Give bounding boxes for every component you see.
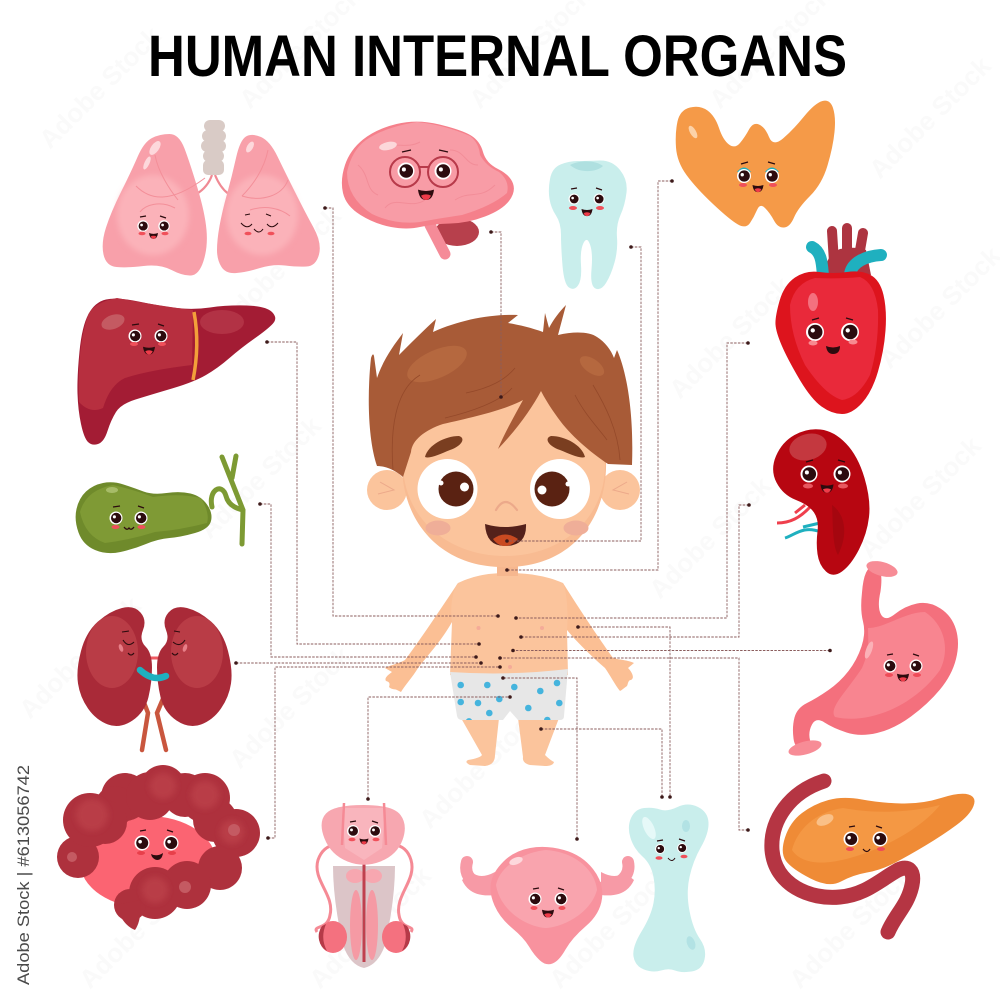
chest marks	[476, 626, 544, 669]
stock watermark: Adobe Stock	[783, 860, 917, 994]
gallbladder face	[110, 506, 148, 529]
esophagus ring	[865, 558, 899, 580]
stock watermark: Adobe Stock	[303, 860, 437, 994]
boy mouth	[485, 524, 526, 546]
cerebrum	[342, 122, 514, 228]
right lung face	[241, 214, 278, 235]
stock watermark: Adobe Stock	[543, 860, 677, 994]
liver face	[128, 324, 168, 354]
aorta	[825, 248, 871, 275]
liver right lobe highlight	[200, 310, 244, 334]
stomach face	[884, 654, 922, 682]
organ: spleen	[773, 429, 869, 575]
bone highlight	[639, 815, 659, 841]
stock watermark: Adobe Stock	[853, 430, 987, 564]
bile ducts	[211, 456, 243, 544]
gallbladder light	[80, 485, 208, 543]
underwear	[450, 669, 568, 720]
heart body	[775, 271, 886, 414]
stock watermark: Adobe Stock	[223, 640, 357, 774]
stomach highlight	[863, 641, 875, 659]
stock watermark: Adobe Stock	[643, 470, 777, 604]
trachea	[201, 120, 226, 175]
stock watermark: Adobe Stock	[213, 200, 347, 334]
bone spots	[682, 820, 697, 951]
organ: uterus	[462, 847, 634, 964]
tooth crown cap	[570, 161, 603, 171]
urethra	[362, 862, 366, 962]
prostate face	[347, 821, 381, 844]
stock watermark: Adobe Stock	[193, 410, 327, 544]
thyroid highlight	[687, 124, 699, 140]
stock watermark: Adobe Stock	[73, 860, 207, 994]
colon highlights	[67, 824, 240, 893]
liver highlight	[99, 311, 127, 333]
right lung	[217, 135, 320, 273]
boy hair	[369, 305, 632, 477]
pancreas body	[783, 794, 975, 884]
organ: male reproductive system	[316, 803, 412, 968]
organ: heart	[775, 228, 886, 414]
liver ligament	[193, 312, 197, 380]
boy torso	[450, 573, 568, 675]
testes	[319, 921, 410, 953]
left lung	[103, 134, 207, 276]
fallopian tubes	[462, 862, 634, 895]
organ: thyroid	[676, 101, 835, 228]
bone body	[629, 804, 709, 972]
spleen shade	[832, 505, 844, 555]
stock watermark: Adobe Stock	[33, 20, 167, 154]
stock watermark: Adobe Stock	[663, 270, 797, 404]
bladder	[322, 805, 405, 865]
organ: stomach	[787, 558, 958, 759]
cerebrum light	[347, 122, 508, 223]
colon	[57, 765, 260, 930]
organ: tooth	[549, 160, 627, 289]
thyroid body	[676, 101, 835, 228]
renal vein	[140, 670, 166, 678]
pancreas highlight	[815, 812, 835, 828]
heart highlight	[808, 293, 818, 311]
uterus body	[490, 847, 602, 964]
pylorus ring	[787, 737, 823, 759]
left kidney	[77, 607, 152, 726]
ureters	[138, 687, 168, 750]
brain highlight	[378, 140, 398, 152]
boy eyebrows	[425, 436, 585, 457]
renal artery	[148, 656, 160, 660]
boy legs	[461, 718, 559, 766]
vertical stock credit: Adobe Stock | #613056742	[14, 765, 33, 985]
boy nose	[496, 502, 517, 510]
lung shading	[117, 175, 298, 255]
pancreas light	[792, 805, 940, 863]
shaft shadow	[333, 866, 395, 968]
boy face	[402, 370, 606, 567]
stock watermark: Adobe Stock	[863, 50, 997, 184]
boy cheeks	[426, 520, 588, 536]
stock watermark: Adobe Stock	[413, 700, 547, 834]
bronchi	[172, 175, 246, 201]
boy eyes	[418, 459, 590, 520]
small intestine	[80, 816, 216, 908]
intestines face	[134, 830, 178, 860]
liver light	[79, 298, 193, 410]
character: boy	[367, 305, 640, 766]
kidney light	[86, 616, 223, 688]
liver body	[77, 299, 275, 445]
tooth body	[549, 160, 627, 289]
stomach body	[793, 566, 958, 749]
tooth face	[568, 188, 604, 216]
boy neck	[497, 560, 518, 576]
boy arms	[385, 583, 634, 692]
cerebellum	[435, 218, 479, 246]
colon soft light	[76, 773, 244, 903]
organ: gallbladder	[76, 456, 243, 553]
heart face	[806, 318, 859, 354]
lung highlights	[142, 139, 256, 170]
gallbladder highlight	[106, 487, 118, 493]
left lung face	[137, 216, 170, 239]
stock watermark: Adobe Stock	[13, 590, 147, 724]
organ: bone	[629, 804, 709, 972]
pancreas face	[844, 826, 888, 852]
duodenum vessel	[772, 781, 913, 932]
organ: kidneys	[77, 607, 232, 750]
bladder centre	[342, 808, 385, 860]
spleen vessels	[777, 505, 811, 523]
right kidney	[157, 607, 232, 726]
brain stem	[430, 225, 445, 254]
stomach light	[834, 612, 945, 719]
seminal vesicles	[346, 869, 382, 883]
brain face with glasses	[390, 150, 458, 200]
organ: liver	[77, 298, 275, 445]
shaft	[350, 890, 378, 960]
organ: brain	[342, 122, 514, 254]
uterus highlight	[508, 855, 524, 867]
lung veins	[136, 150, 290, 216]
title: HUMAN INTERNAL ORGANS	[148, 24, 847, 89]
spleen face	[800, 460, 850, 493]
connector dots	[234, 179, 832, 841]
spleen highlight	[786, 430, 830, 464]
uterus face	[528, 888, 568, 918]
organ: lungs	[103, 120, 320, 276]
boy ears	[367, 470, 640, 510]
heart vessels	[832, 228, 863, 262]
face upper tone	[403, 370, 605, 556]
heart inner	[790, 277, 878, 400]
thyroid face	[737, 162, 779, 192]
kidney faces	[118, 631, 188, 655]
spleen body	[773, 429, 869, 575]
organ: intestines	[57, 765, 260, 930]
gallbladder body	[76, 482, 211, 553]
blue vessels	[812, 247, 881, 276]
sperm ducts	[316, 844, 412, 932]
ureter tips	[342, 803, 386, 845]
connector lines	[236, 181, 830, 839]
uterus light	[496, 850, 597, 928]
organ: pancreas	[772, 781, 975, 932]
bone face	[655, 839, 688, 860]
brain folds	[358, 142, 495, 208]
